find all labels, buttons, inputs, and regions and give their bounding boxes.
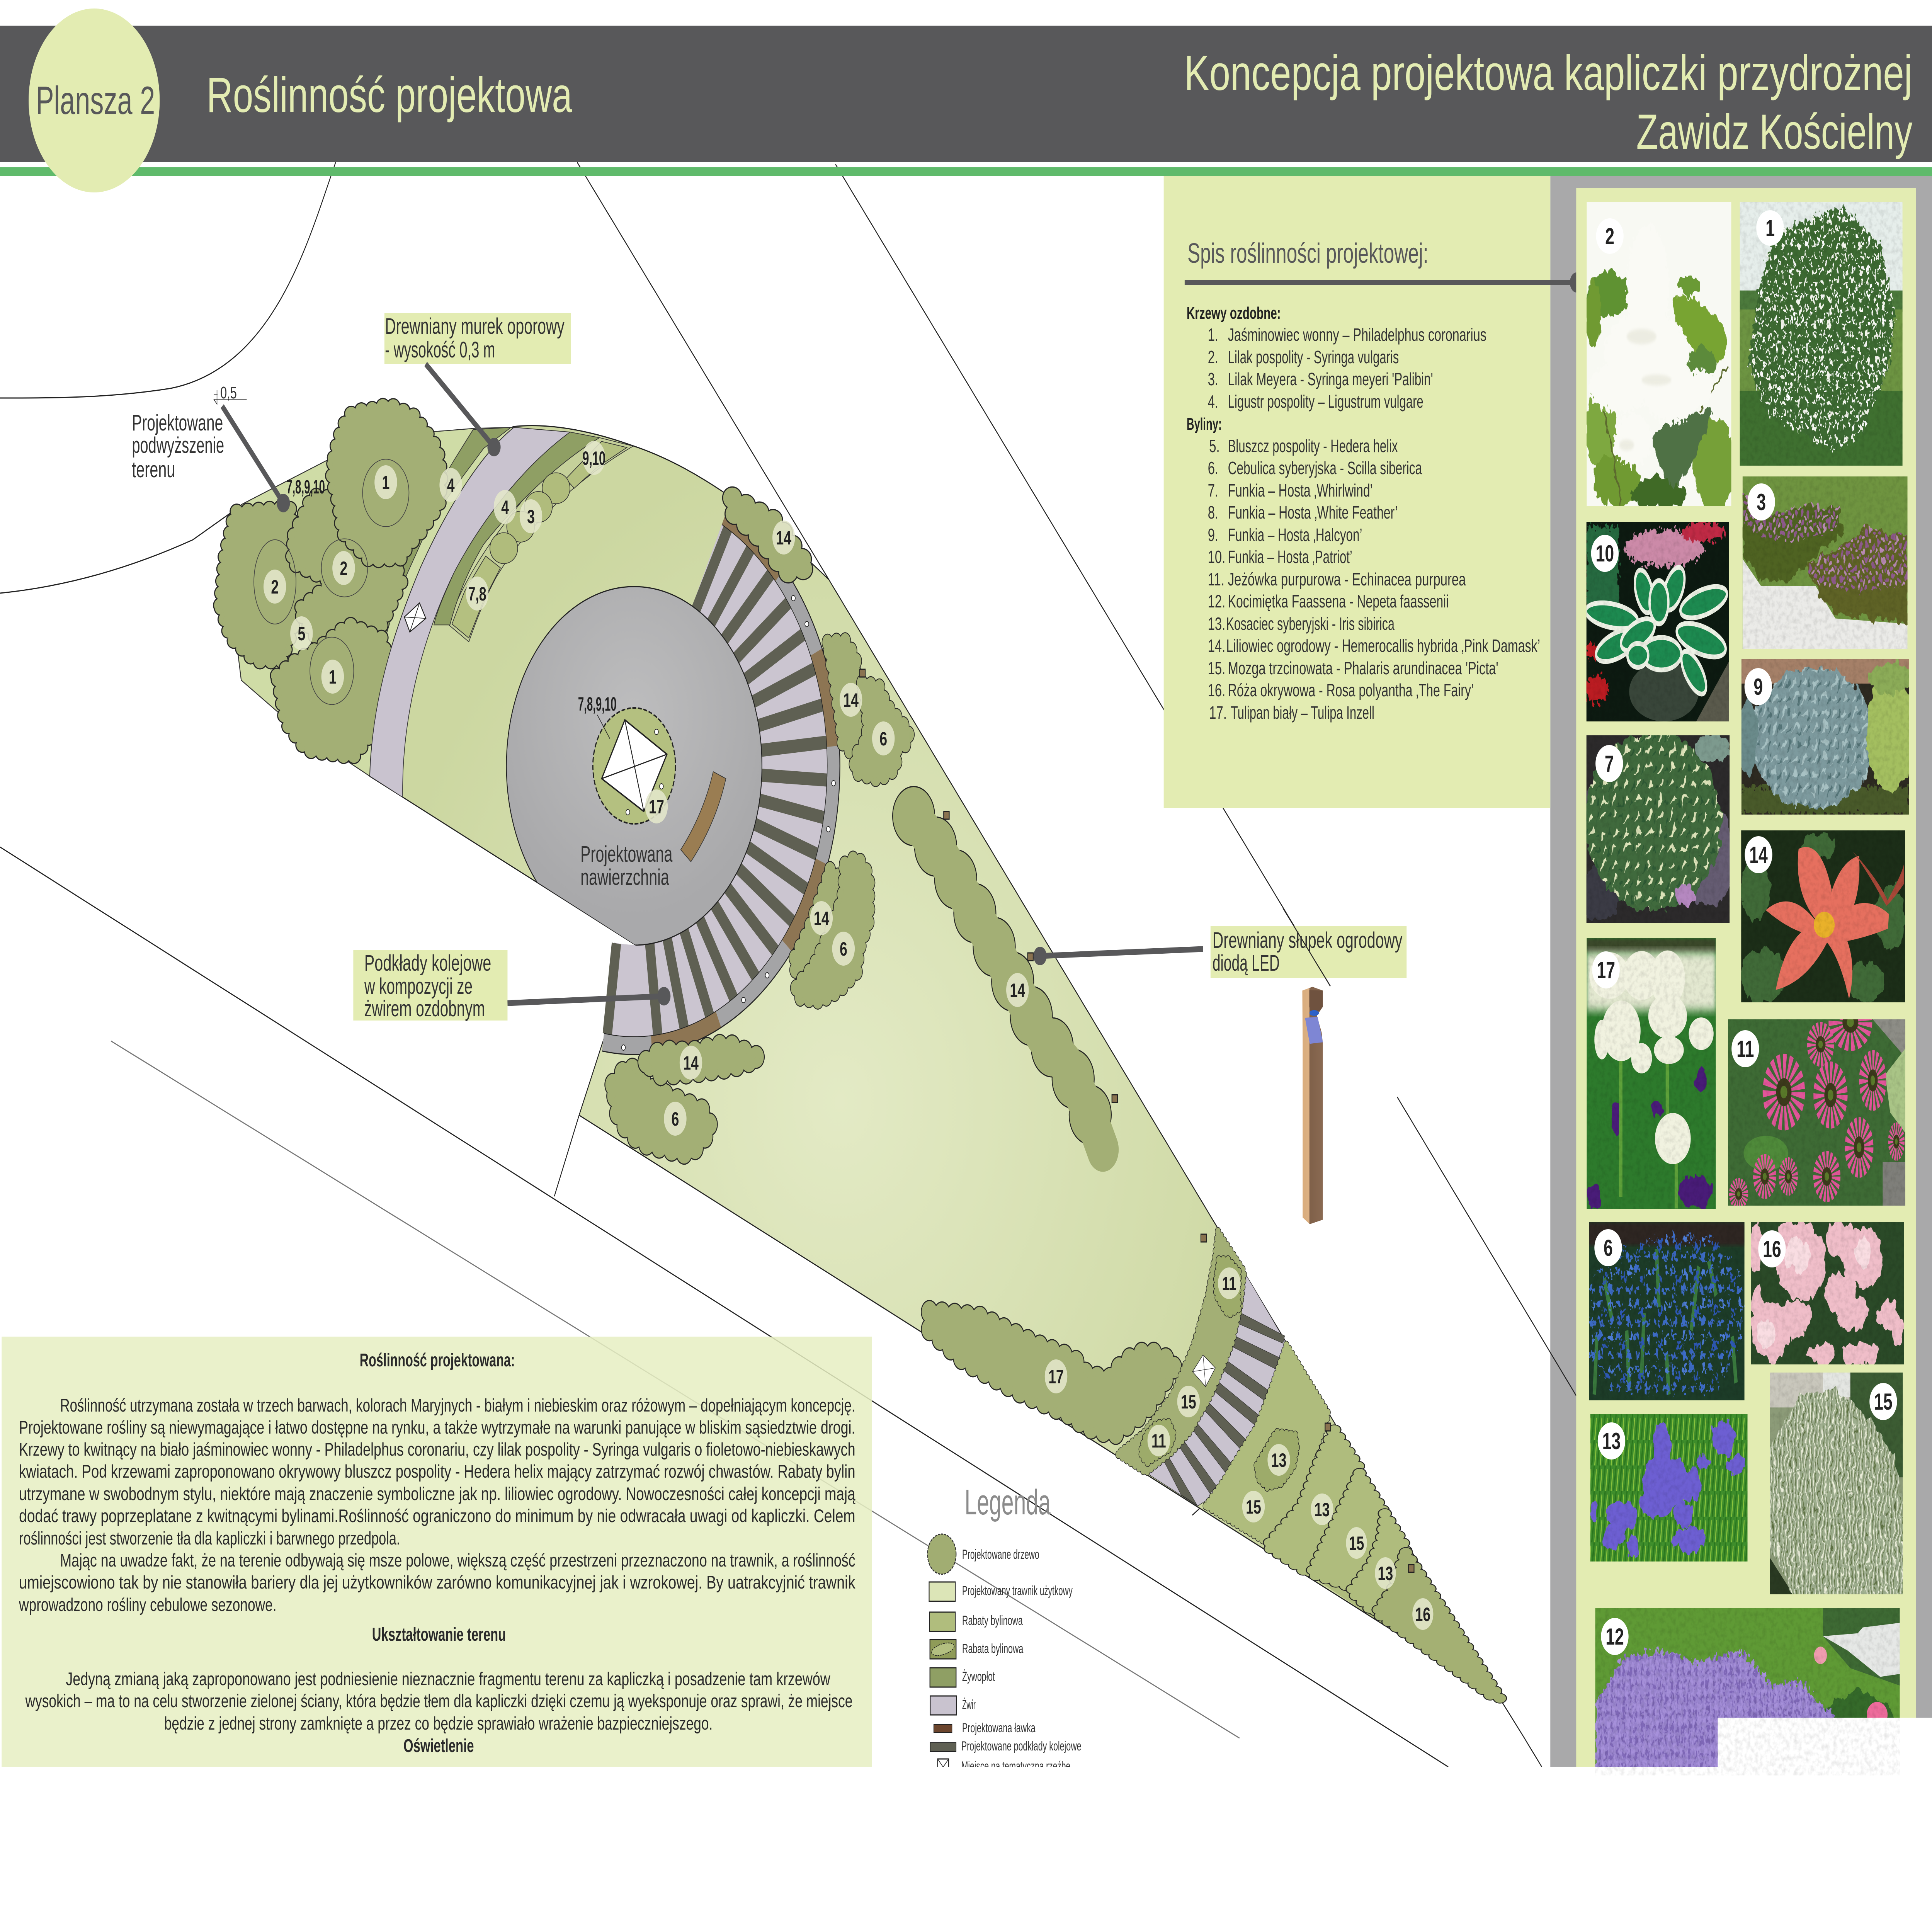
photo 3: Meyer lilac over white gravel [1743,476,1908,649]
panel: plant list: Spis roślinności projektowej: [1187,238,1429,269]
panel: plant list: Tulipan biały – Tulipa Inzell [1231,703,1374,723]
scale bar: 4 [1341,1824,1349,1847]
panel: description text: zadanie podkreślić łuk wokół kapliczki oraz oświetlić rzeźbę o zmroku. [20,1868,428,1889]
plant groups near fan [613,498,909,1154]
photo 15: ribbon grass [1770,1373,1905,1599]
photo number badges: 14 [1749,842,1768,868]
scale bar [1210,1777,1525,1847]
panel: plant list: 1. [1208,325,1218,345]
plant number labels: 16 [1415,1604,1430,1626]
panel: plant list: Mozga trzcinowata - Phalaris arundinacea 'Picta' [1228,659,1498,678]
sculpture spot upper [404,603,426,632]
panel: description text: użytkowników drogi jednocześnie zaznaczając obecność ciekawego biektu. [20,1824,478,1844]
panel: plant list: Bluszcz pospolity - Hedera helix [1228,437,1398,456]
panel: plant list: 14. [1208,636,1225,656]
panel: plant list: Funkia – Hosta ‚Patriot’ [1228,548,1352,567]
panel: plant list: Lilak pospolity - Syringa vulgaris [1228,348,1399,367]
photo 16: pink roses [1750,1221,1904,1366]
sleeper fan: gravel, sleepers, ring [357,378,911,1154]
legend: Drewniany oświetleniowy słupek ogrodowy [962,1801,1116,1815]
panel: description text: utrzymane w swobodnym stylu, niektóre mają znaczenie symboliczne jak np. liliowiec ogrodowy. Nowoczesności całej koncepcji mają [19,1483,855,1504]
legend: Rabaty bylinowa [962,1613,1023,1628]
long hedge 14 [914,816,1103,1150]
legend: Żwir [962,1698,976,1712]
plant number labels: 7,8,9,10 [286,476,325,498]
label: projected surface: Projektowana [580,841,672,867]
plant number labels: 14 [1010,980,1025,1002]
plant number labels: 14 [776,527,791,549]
plant number labels: 13 [1315,1499,1330,1521]
plant number labels: 11 [1222,1273,1236,1295]
photo number badges: 10 [1596,541,1614,567]
panel: description text: Oświetlenie [403,1735,474,1756]
photo number badges: 16 [1763,1237,1781,1262]
plant number labels: 4 [501,497,509,519]
panel: description text: Krzewy to kwitnący na biało jaśminowiec wonny - Philadelphus coronariu, czy lilak pospolity - Syringa vulgaris o fioletowo-niebieskawych [19,1439,855,1459]
illustration: wooden LED post [1302,987,1323,1224]
plant number labels: 14 [683,1053,699,1074]
plant number labels: 14 [843,690,859,711]
panel: description text: Jedyną zmianą jaką zaproponowano jest podniesienie nieznacznie fragmentu terenu za kapliczką i posadzenie tam krzewów [66,1669,830,1689]
panel: plant photo backing grey [1550,176,1932,1917]
label: projected surface: nawierzchnia [580,864,669,890]
plant number labels: 4 [447,475,455,497]
callout: retaining wall [384,313,571,456]
panel: plant list: Kocimiętka Faassena - Nepeta faassenii [1228,592,1449,611]
photo 2: white lilac [1585,202,1735,510]
scale bar: 1 [1243,1824,1252,1847]
legend [927,1482,1116,1815]
callout: raised terrain [132,406,290,512]
panel: plant list: Róża okrywowa - Rosa polyantha ‚The Fairy’ [1228,681,1474,700]
callout: garden post: Drewniany słupek ogrodowy [1213,927,1403,953]
panel: plant list: Kosaciec syberyjski - Iris sibirica [1226,614,1395,634]
callout: raised terrain: terenu [132,457,175,482]
panel: plant list: 17. [1209,703,1227,723]
panel: plant list: 15. [1208,659,1225,678]
panel: plant list: 13. [1208,614,1225,634]
panel: plant list: Cebulica syberyjska - Scilla siberica [1228,459,1422,478]
photo 14: daylily [1741,830,1905,1004]
photo number badges [1591,210,1897,1655]
plant number labels: 7,8 [468,583,486,605]
panel: plant list: Liliowiec ogrodowy - Hemerocallis hybrida ‚Pink Damask’ [1226,636,1540,656]
photo number badges: 13 [1602,1429,1621,1454]
photo number badges: 9 [1753,674,1763,700]
ring lamps [621,595,1225,1426]
panel: plant list: Lilak Meyera - Syringa meyeri 'Palibin' [1228,370,1433,389]
legend: Projektowany trawnik użytkowy [962,1584,1073,1598]
legend: Rabata bylinowa [962,1641,1024,1656]
photo 9: hosta Halcyon [1737,659,1914,815]
panel: plant list: 16. [1208,681,1225,700]
photo 17: white tulips [1587,938,1716,1209]
panel: plant list: 2. [1208,348,1218,367]
panel: plant list: Ligustr pospolity – Ligustrum vulgare [1228,392,1423,412]
legend: Miejsce na tematyczną rzeźbę [961,1759,1070,1774]
panel: description text: dodać trawy poprzeplatane z kwitnącymi bylinami.Roślinność ograniczono do minimum by nie odwracała uwagi od kapliczki. Celem [19,1505,855,1526]
panel: plant list: Funkia – Hosta ‚Whirlwind’ [1228,481,1373,500]
legend: Legenda [964,1482,1051,1522]
photo 12: catmint border [1595,1608,1900,1856]
scale bar: 2 [1276,1824,1285,1847]
project title: Koncepcja projektowa kapliczki przydrożnej [1184,45,1912,101]
photo number badges: 3 [1757,490,1766,515]
chapel planter and roof [593,708,675,824]
panel: plant list: Jaśminowiec wonny – Philadelphus coronarius [1228,325,1486,345]
panel: plant list: 4. [1208,392,1218,412]
site context lines [0,162,1576,1852]
photo number badges: 12 [1605,1624,1624,1650]
photo number badges: 15 [1874,1389,1893,1415]
plant number labels: 17 [649,796,664,818]
panel: description text: Roślinność utrzymana została w trzech barwach, kolorach Maryjnych - białym i niebieskim oraz różowym – dopełniającym koncepcję. [60,1395,855,1415]
photo number badges: 17 [1597,958,1615,983]
legend: Lampy ogrodowe ziemne [962,1781,1054,1795]
scale bar: 5 [1373,1824,1381,1847]
panel: description text: umiejscowiono tak by nie stanowiła bariery dla jej użytkowników zarówno komunikacyjnej jak i wzrokowej. By uatrakcyjnić trawnik [19,1572,855,1592]
photo number badges: 2 [1605,224,1614,250]
panel: plant list: 9. [1208,526,1218,545]
elevation mark: 0,5 [220,383,237,402]
photo 10: hosta Patriot [1585,522,1729,721]
badge text: Plansza 2 [36,78,155,122]
panel: plant list: 7. [1208,481,1218,500]
plant number labels: 15 [1181,1391,1196,1413]
scale bar: 0 [1210,1824,1218,1847]
panel: description text: wprowadzono rośliny cebulowe sezonowe. [19,1594,277,1615]
panel: plant list: 10. [1208,548,1225,567]
photo number badges: 7 [1605,751,1614,777]
raised shrub area with trees [220,404,514,776]
plant number labels: 17 [1048,1366,1064,1388]
plant number labels: 5 [298,623,305,645]
plant number labels: 7,8,9,10 [578,694,617,715]
plant number labels: 13 [1378,1563,1393,1585]
panel: plant list: 11. [1208,570,1225,589]
sheet title: Roślinność projektowa [206,67,572,123]
photo 6: siberian squill [1589,1222,1745,1400]
panel: plant list: 8. [1208,503,1218,522]
scale bar: 3 [1309,1824,1317,1847]
photo 7: hosta Whirlwind [1580,732,1736,923]
header badge circle [29,9,160,192]
hedge 17 [929,1312,1175,1434]
panel: plant photographs [1576,188,1916,1886]
garden post markers [860,669,1414,1572]
plant number labels: 1 [382,472,389,494]
photo texture [1587,202,1909,1856]
panel: description text: roślinności jest stworzenie tła dla kapliczki i barwnego przedpola. [19,1528,400,1548]
callout: railway sleepers [353,950,670,1021]
panel: plant list [1164,176,1583,808]
panel: plant list: Funkia – Hosta ‚White Feather’ [1228,503,1398,522]
plant number labels: 3 [527,506,535,528]
plant number labels: 11 [1151,1431,1166,1452]
plant number labels: 6 [879,728,887,750]
callout: retaining wall: - wysokość 0,3 m [385,337,495,362]
plant number labels: 6 [672,1109,679,1130]
lawn [370,425,1500,1698]
panel: description text: Zważając na bezpieczeństwo ale także estetykę i funkcję sakralną miejsca zaprojektowano wzdłuż sąsiadującej z drogą granicy [60,1780,858,1800]
gravel arc with hedge [370,427,633,797]
legend: Projektowane podkłady kolejowe [961,1739,1082,1754]
plant number labels: 15 [1246,1497,1261,1518]
panel: plant list: Funkia – Hosta ‚Halcyon’ [1228,526,1362,545]
callout: garden post [1034,908,1406,986]
lower crossing band: hedge, gravel, sleepers [1117,1231,1328,1543]
plant number labels: 1 [329,667,337,688]
callout: retaining wall: Drewniany murek oporowy [385,313,565,339]
project title: Zawidz Kościelny [1636,104,1913,160]
label: projected surface [580,841,672,890]
panel: description text: Mając na uwadze fakt, że na terenie odbywają się msze polowe, większą część przestrzeni przeznaczono na trawnik, a roślinność [60,1550,855,1570]
callout: raised terrain: podwyższenie [132,432,224,458]
photo 11: echinacea [1728,1004,1905,1206]
elevation mark [214,383,247,404]
photo 1: mock orange shrub [1740,202,1903,466]
panel: description text: wysokich – ma to na celu stworzenie zielonej ściany, która będzie tłem dla kapliczki dzięki czemu ją wyeksponuje oraz sprawi, że miejsce [25,1691,852,1711]
panel: plant list: 12. [1208,592,1225,611]
legend: Projektowana ławka [962,1721,1036,1735]
project title [1184,45,1913,160]
plant number labels: 6 [840,939,847,960]
panel: description text: będzie z jednej strony zamknięte a przez co będzie sprawiało wrażenie bazpieczniejszego. [164,1713,713,1733]
photo number badges: 11 [1736,1036,1754,1062]
panel: plant list: Byliny: [1187,415,1222,434]
callout: raised terrain: Projektowane [132,410,223,435]
legend: Projektowane drzewo [962,1547,1039,1562]
panel: description text: Na terenie projektowanym wprowadzono oświetlenie w postaci punktów świetlnych wbudowanych w nawierzchnię. Oświetlenie ma [20,1846,858,1866]
scale bar: Skala 1:100 [1413,1787,1525,1819]
panel: description text: Roślinność projektowana: [360,1349,515,1370]
panel: description text: Projektowane rośliny są niewymagające i łatwo dostępne na rynku, a także wytrzymałe na warunki panujące w bliskim sąsiedztwie drogi. [19,1417,855,1437]
plan: site drawing [220,378,1500,1698]
plant number labels: 14 [814,908,829,930]
panel: plant list: 3. [1208,370,1218,389]
photo number badges: 1 [1765,216,1775,242]
panel: description text [2,1337,872,1916]
callout: railway sleepers: w kompozycji ze [364,973,473,999]
wooden bench [681,772,726,862]
callout: railway sleepers: Podkłady kolejowe [364,950,491,976]
plant number labels: 13 [1271,1450,1286,1471]
panel: plant list: 6. [1208,459,1218,478]
panel: plant list: Jeżówka purpurowa - Echinacea purpurea [1228,570,1466,589]
plant number labels [264,441,1433,1630]
plaza surface [507,587,762,945]
callout: railway sleepers: żwirem ozdobnym [364,996,485,1021]
panel: description text: terenu słupki z diodami wykonane z drewna o bardzo prostej formie. Nie odwrócą one uwagi od kapliczki, a w nocy będą widoczne dla [20,1802,858,1822]
panel: plant list: 5. [1209,437,1220,456]
panel: description text: kwiatach. Pod krzewami zaproponowano okrywowy bluszcz pospolity - Hedera helix mający zatrzymać rozwój chwastów. Rabaty bylin [19,1461,855,1482]
photo number badges: 6 [1604,1235,1613,1261]
header band [0,9,1932,192]
panel: plant list: Krzewy ozdobne: [1187,304,1281,323]
plant number labels: 15 [1349,1533,1364,1555]
panel: description text: Ukształtowanie terenu [372,1624,506,1645]
plant number labels: 2 [271,577,279,598]
legend: Żywopłot [962,1669,995,1684]
plant number labels: 9,10 [582,448,605,469]
perennial beds towards tip [1267,1430,1500,1698]
photo 13: siberian iris [1590,1414,1748,1561]
plant number labels: 2 [340,558,347,580]
callout: garden post: diodą LED [1213,950,1280,976]
